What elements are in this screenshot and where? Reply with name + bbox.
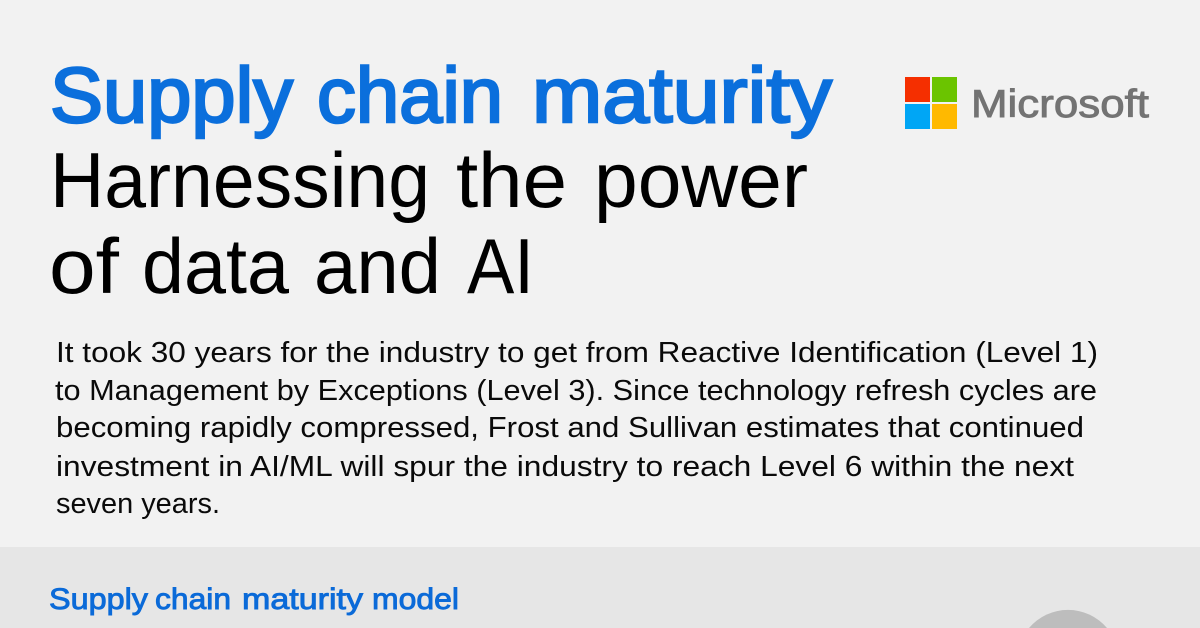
text block: introduction: It took 30 years for the industry to get from Reactive Identification (Level 1) [56,337,1098,369]
icon: Microsoft logo: Microsoft [971,83,1149,126]
text block: introduction: investment in AI/ML will spur the industry to reach Level 6 within the next [56,451,1074,483]
heading: supply chain maturity model: chain [155,583,231,616]
title: of [49,222,119,310]
title: the [456,136,567,224]
text block: introduction: becoming rapidly compressed, Frost and Sullivan estimates that continued [56,412,1084,444]
title: chain [317,51,503,139]
heading: supply chain maturity model: model [372,583,459,616]
icon: Microsoft logo [905,77,1149,129]
text block: introduction: to Management by Exceptions (Level 3). Since technology refresh cycles are [55,375,1097,407]
title: AI [467,222,534,310]
heading: supply chain maturity model: maturity [242,583,363,616]
title: and [314,222,441,310]
title: power [594,136,808,224]
title [49,51,832,310]
text block: introduction: seven years. [56,488,220,520]
title: data [142,222,290,310]
heading: supply chain maturity model: Supply [49,583,148,616]
title: maturity [532,51,832,139]
icon: grey circle [1029,610,1107,628]
title: Supply [50,51,293,139]
heading: supply chain maturity model [49,583,459,616]
title: Harnessing [50,136,430,224]
text block: introduction [55,337,1098,520]
panel: supply chain maturity model [0,547,1200,628]
